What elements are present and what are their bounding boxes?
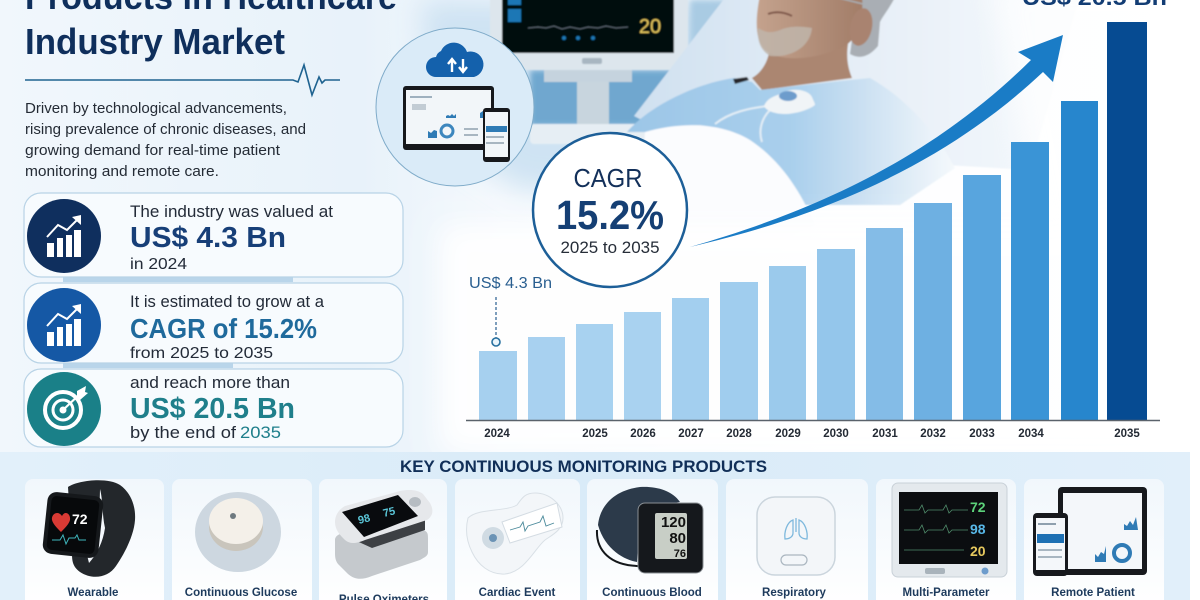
icon: fingertip oximeter: 75 [382, 505, 397, 520]
icon: laptop [403, 86, 494, 150]
icon: cardiac patch [467, 493, 563, 574]
stat card: industry value: in 2024 [130, 256, 187, 273]
divider with heartbeat pulse [25, 65, 340, 95]
year labels: 2033 [969, 428, 995, 440]
year labels: 2029 [775, 428, 801, 440]
product card: respiratory [726, 479, 868, 600]
photo: patient and bedside monitor [420, 0, 1080, 270]
right margin [1190, 0, 1200, 600]
icon: phone [483, 108, 510, 162]
products strip [0, 452, 1190, 600]
icon: blood pressure monitor: 120 [661, 514, 686, 531]
icon: patient monitor: 20 [970, 543, 986, 559]
stat card: CAGR: CAGR of 15.2% [130, 313, 317, 344]
callout: 2024 value [469, 275, 552, 346]
year labels: 2034 [1018, 428, 1044, 440]
stat card: industry value: US$ 4.3 Bn [130, 222, 286, 254]
bar chart [466, 0, 1167, 440]
year labels: 2035 [1114, 428, 1140, 440]
product card: pulse oximeter [319, 479, 447, 600]
product card: blood pressure [587, 479, 718, 600]
stat card: CAGR: It is estimated to grow at a [130, 293, 325, 311]
photo: pillow and bed [634, 0, 1080, 170]
product card: remote patient: Remote Patient [1051, 587, 1135, 599]
year labels: 2028 [726, 428, 752, 440]
icon: bar chart growth [27, 288, 101, 362]
product card: wearable [25, 479, 164, 600]
growth arrow [690, 35, 1063, 247]
product card: blood pressure: Continuous Blood [602, 587, 702, 599]
icon: bar chart growth [27, 199, 101, 273]
stat card connectors [63, 277, 293, 368]
stat card: CAGR: from 2025 to 2035 [130, 345, 273, 362]
year labels: 2026 [630, 428, 656, 440]
photo: bedside monitor [490, 0, 688, 144]
stat card: forecast value [24, 369, 403, 447]
stat card: forecast value: 2035 [240, 424, 281, 442]
icon: blood pressure monitor: 80 [669, 530, 686, 547]
stat card: industry value: The industry was valued at [130, 203, 333, 221]
CAGR callout: 15.2% [556, 192, 664, 238]
product card: wearable: Wearable [68, 587, 118, 599]
icon: glucose sensor patch [195, 492, 281, 572]
icon: smartwatch: 72 [72, 511, 88, 527]
photo: patient [627, 0, 955, 205]
photo: bed sheet [640, 125, 815, 270]
photo fade overlays [440, 0, 1200, 452]
year labels: 2031 [872, 428, 898, 440]
callout: 2024 value: US$ 4.3 Bn [469, 275, 552, 292]
icon: blood pressure monitor [597, 487, 703, 573]
product card: glucose monitor: Continuous Glucose [185, 587, 297, 599]
description text: monitoring and remote care. [25, 163, 219, 180]
year labels: 2030 [823, 428, 849, 440]
CAGR callout [533, 133, 687, 287]
icon: respiratory sensor [757, 497, 835, 575]
icon: cloud connected devices badge [376, 28, 534, 186]
photo: bedside monitor: 20 [639, 16, 661, 38]
title: Industry Market [25, 21, 285, 62]
photo: ward wall behind monitor [420, 0, 740, 190]
icon: fingertip oximeter [335, 490, 432, 579]
products heading: KEY CONTINUOUS MONITORING PRODUCTS [400, 458, 767, 476]
icon: patient monitor [892, 483, 1007, 577]
product card: glucose monitor [172, 479, 312, 600]
stat card: forecast value: by the end of [130, 424, 236, 442]
stat card: forecast value: and reach more than [130, 374, 290, 392]
year labels: 2027 [678, 428, 704, 440]
stat card: forecast value: US$ 20.5 Bn [130, 393, 295, 425]
year labels: 2024 [484, 428, 510, 440]
description text: Driven by technological advancements, [25, 100, 287, 117]
icon: tablet and phone dashboard [1033, 487, 1147, 576]
year labels: 2025 [582, 428, 608, 440]
year labels: 2032 [920, 428, 946, 440]
year labels [484, 428, 1140, 440]
bars [479, 22, 1147, 420]
axis [466, 420, 1160, 422]
stat card: CAGR [24, 283, 403, 363]
product card: cardiac event: Cardiac Event [479, 587, 556, 599]
description text: growing demand for real-time patient [25, 142, 281, 159]
product card: multi-parameter [876, 479, 1016, 600]
icon: fingertip oximeter: 98 [357, 512, 372, 527]
icon: cloud [426, 43, 483, 77]
title [25, 0, 397, 62]
description text [25, 100, 306, 180]
icon: blood pressure monitor: 76 [674, 548, 686, 560]
icon: target with arrow [27, 372, 101, 446]
stat card: industry value [24, 193, 403, 277]
product card: cardiac event [455, 479, 580, 600]
CAGR callout: CAGR [574, 163, 642, 193]
icon: patient monitor: 98 [970, 521, 986, 537]
product card: remote patient [1024, 479, 1164, 600]
icon: patient monitor: 72 [970, 499, 986, 515]
product card: multi-parameter: Multi-Parameter [903, 587, 990, 599]
product card: respiratory: Respiratory [762, 587, 827, 599]
description text: rising prevalence of chronic diseases, and [25, 121, 306, 138]
CAGR callout: 2025 to 2035 [560, 238, 660, 257]
